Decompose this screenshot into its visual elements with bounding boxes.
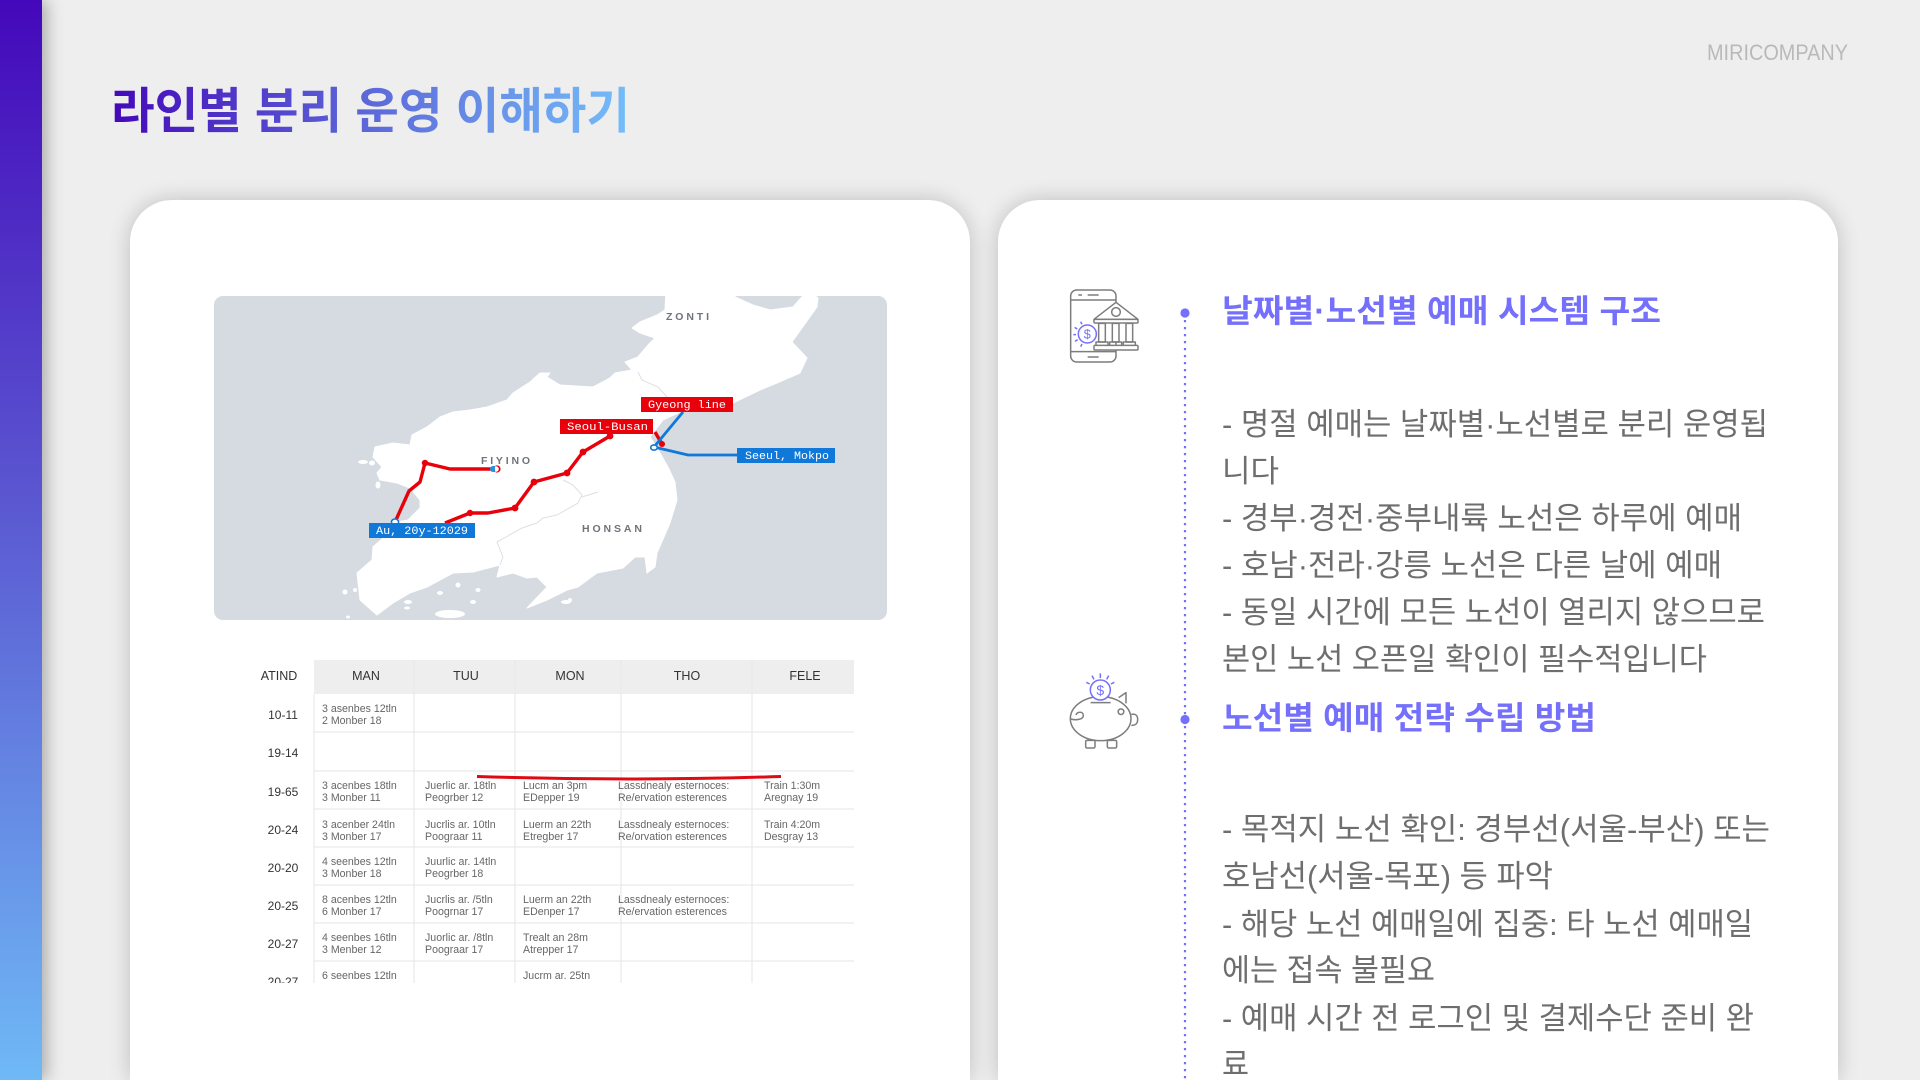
icon: mobile bank: $ — [1084, 327, 1091, 341]
table cells: EDepper 19 — [523, 792, 580, 804]
table cells: Juerlic ar. 18tln — [425, 780, 496, 792]
time column: 20-20 — [268, 861, 299, 875]
route label: Seeul, Mokpo — [737, 448, 835, 463]
route label: Seoul-Busan — [560, 419, 653, 434]
red route north — [395, 460, 501, 522]
table cells: Lucm an 3pm — [523, 780, 587, 792]
timetable — [261, 660, 854, 990]
table cells: Lassdnealy esternoces: — [618, 780, 729, 792]
table cells: Atrepper 17 — [523, 944, 578, 956]
text block: section 2: 호남선(서울-목포) 등 파악 — [1222, 859, 1553, 894]
table cells: Luerm an 22th — [523, 894, 591, 906]
table cells: 3 Monber 18 — [322, 868, 382, 880]
table header: TUU — [453, 669, 479, 683]
text block: section 2 — [1222, 812, 1770, 1080]
time column: 10-11 — [268, 708, 298, 722]
table cells: Jucrlis ar. /5tln — [425, 894, 493, 906]
table cells: Jucrlis ar. 10tln — [425, 819, 496, 831]
heading: section 2: 노선별 예매 전략 수립 방법 — [1222, 700, 1596, 736]
table cells: Trealt an 28m — [523, 932, 588, 944]
route label: Gyeong line: Gyeong line — [648, 400, 726, 412]
text block: section 1: 니다 — [1222, 454, 1279, 489]
icon: piggy bank — [1070, 673, 1138, 748]
table cells: 3 Monber 11 — [322, 792, 381, 804]
timeline dotted line — [1180, 308, 1190, 1080]
title: 라인별 분리 운영 이해하기 — [111, 85, 630, 139]
map region labels: FIYINO — [481, 455, 530, 467]
table cells: 4 seenbes 12tln — [322, 856, 397, 868]
text block: section 1: - 호남·전라·강릉 노선은 다른 날에 예매 — [1222, 548, 1722, 583]
text block: section 1: - 명절 예매는 날짜별·노선별로 분리 운영됩 — [1222, 407, 1768, 442]
table cells: 4 seenbes 16tln — [322, 932, 397, 944]
time column: 20-24 — [268, 823, 299, 837]
table cells: Lassdnealy esternoces: — [618, 819, 729, 831]
table cells: Juurlic ar. 14tln — [425, 856, 496, 868]
table cells: Poogrnar 17 — [425, 906, 483, 918]
route label: Seeul, Mokpo: Seeul, Mokpo — [745, 451, 829, 463]
table cells: Re/orvation esterences — [618, 831, 727, 843]
table cells: 3 Monber 17 — [322, 831, 382, 843]
table cells: Juorlic ar. /8tln — [425, 932, 493, 944]
table cells: Poograar 11 — [425, 831, 483, 843]
table cells: Aregnay 19 — [764, 792, 818, 804]
table header: THO — [674, 669, 700, 683]
panel: right card — [998, 200, 1838, 1080]
table cells: Train 4:20m — [764, 819, 820, 831]
time column: 20-27 — [268, 975, 299, 989]
sidebar gradient band — [0, 0, 42, 1080]
table header: FELE — [789, 669, 821, 683]
route label: Gyeong line — [641, 397, 733, 412]
text block: section 1: - 동일 시간에 모든 노선이 열리지 않으므로 — [1222, 595, 1765, 630]
text block: section 2: 에는 접속 불필요 — [1222, 953, 1435, 988]
table cells: 6 Monber 17 — [322, 906, 382, 918]
map region labels: HONSAN — [582, 523, 642, 535]
map inland borders — [497, 372, 667, 565]
table cells: 3 Menber 12 — [322, 944, 382, 956]
table cells: 3 acenber 24tln — [322, 819, 395, 831]
brand label: MIRICOMPANY — [1707, 40, 1848, 65]
icon: mobile bank — [1071, 290, 1138, 362]
text block: section 1 — [1222, 407, 1768, 677]
table cells: EDenper 17 — [523, 906, 580, 918]
time column: 20-25 — [268, 899, 299, 913]
route label: date — [369, 523, 475, 538]
table cells: 2 Monber 18 — [322, 715, 382, 727]
red highlight stroke — [477, 776, 781, 779]
table cells: 6 seenbes 12tln — [322, 970, 397, 982]
time column — [268, 708, 299, 989]
route label: Seoul-Busan: Seoul-Busan — [567, 422, 648, 434]
map islands — [342, 460, 572, 618]
map region labels: ZONTI — [666, 311, 709, 323]
table cells: Re/ervation esterences — [618, 792, 727, 804]
heading: section 1: 날짜별·노선별 예매 시스템 구조 — [1222, 293, 1661, 329]
table cells: Jucrm ar. 25tn — [523, 970, 590, 982]
table cells: Poograar 17 — [425, 944, 483, 956]
table header: ATIND — [261, 669, 297, 683]
red route Seoul-Busan — [445, 432, 665, 523]
time column: 20-27 — [268, 937, 299, 951]
table cells: Lassdnealy esternoces: — [618, 894, 729, 906]
table cells: Luerm an 22th — [523, 819, 591, 831]
map region labels — [481, 311, 709, 535]
text block: section 2: - 목적지 노선 확인: 경부선(서울-부산) 또는 — [1222, 812, 1770, 847]
table cells: 3 acenbes 18tln — [322, 780, 397, 792]
text block: section 2: - 예매 시간 전 로그인 및 결제수단 준비 완 — [1222, 1001, 1754, 1036]
time column: 19-14 — [268, 746, 299, 760]
table cells: 3 asenbes 12tln — [322, 703, 397, 715]
text block: section 1: - 경부·경전·중부내륙 노선은 하루에 예매 — [1222, 501, 1742, 536]
table cells: Re/ervation esterences — [618, 906, 727, 918]
icon: piggy bank: $ — [1096, 682, 1104, 698]
table cells — [322, 703, 820, 982]
table cells: Peogrber 18 — [425, 868, 483, 880]
table header — [260, 671, 820, 680]
map panel — [214, 290, 887, 620]
table header: MAN — [352, 669, 380, 683]
table cells: Etregber 17 — [523, 831, 578, 843]
text block: section 2: - 해당 노선 예매일에 집중: 타 노선 예매일 — [1222, 907, 1753, 942]
time column: 19-65 — [268, 785, 299, 799]
table cells: Peogrber 12 — [425, 792, 483, 804]
blue routes — [391, 412, 738, 525]
table cells: Desgray 13 — [764, 831, 818, 843]
route label: date: Au, 20y-12029 — [376, 526, 468, 538]
map land — [357, 290, 818, 615]
table header: MON — [555, 669, 585, 683]
text block: section 1: 본인 노선 오픈일 확인이 필수적입니다 — [1222, 642, 1707, 677]
table cells: Train 1:30m — [764, 780, 820, 792]
table cells: 8 acenbes 12tln — [322, 894, 397, 906]
panel: left card — [130, 200, 970, 1080]
